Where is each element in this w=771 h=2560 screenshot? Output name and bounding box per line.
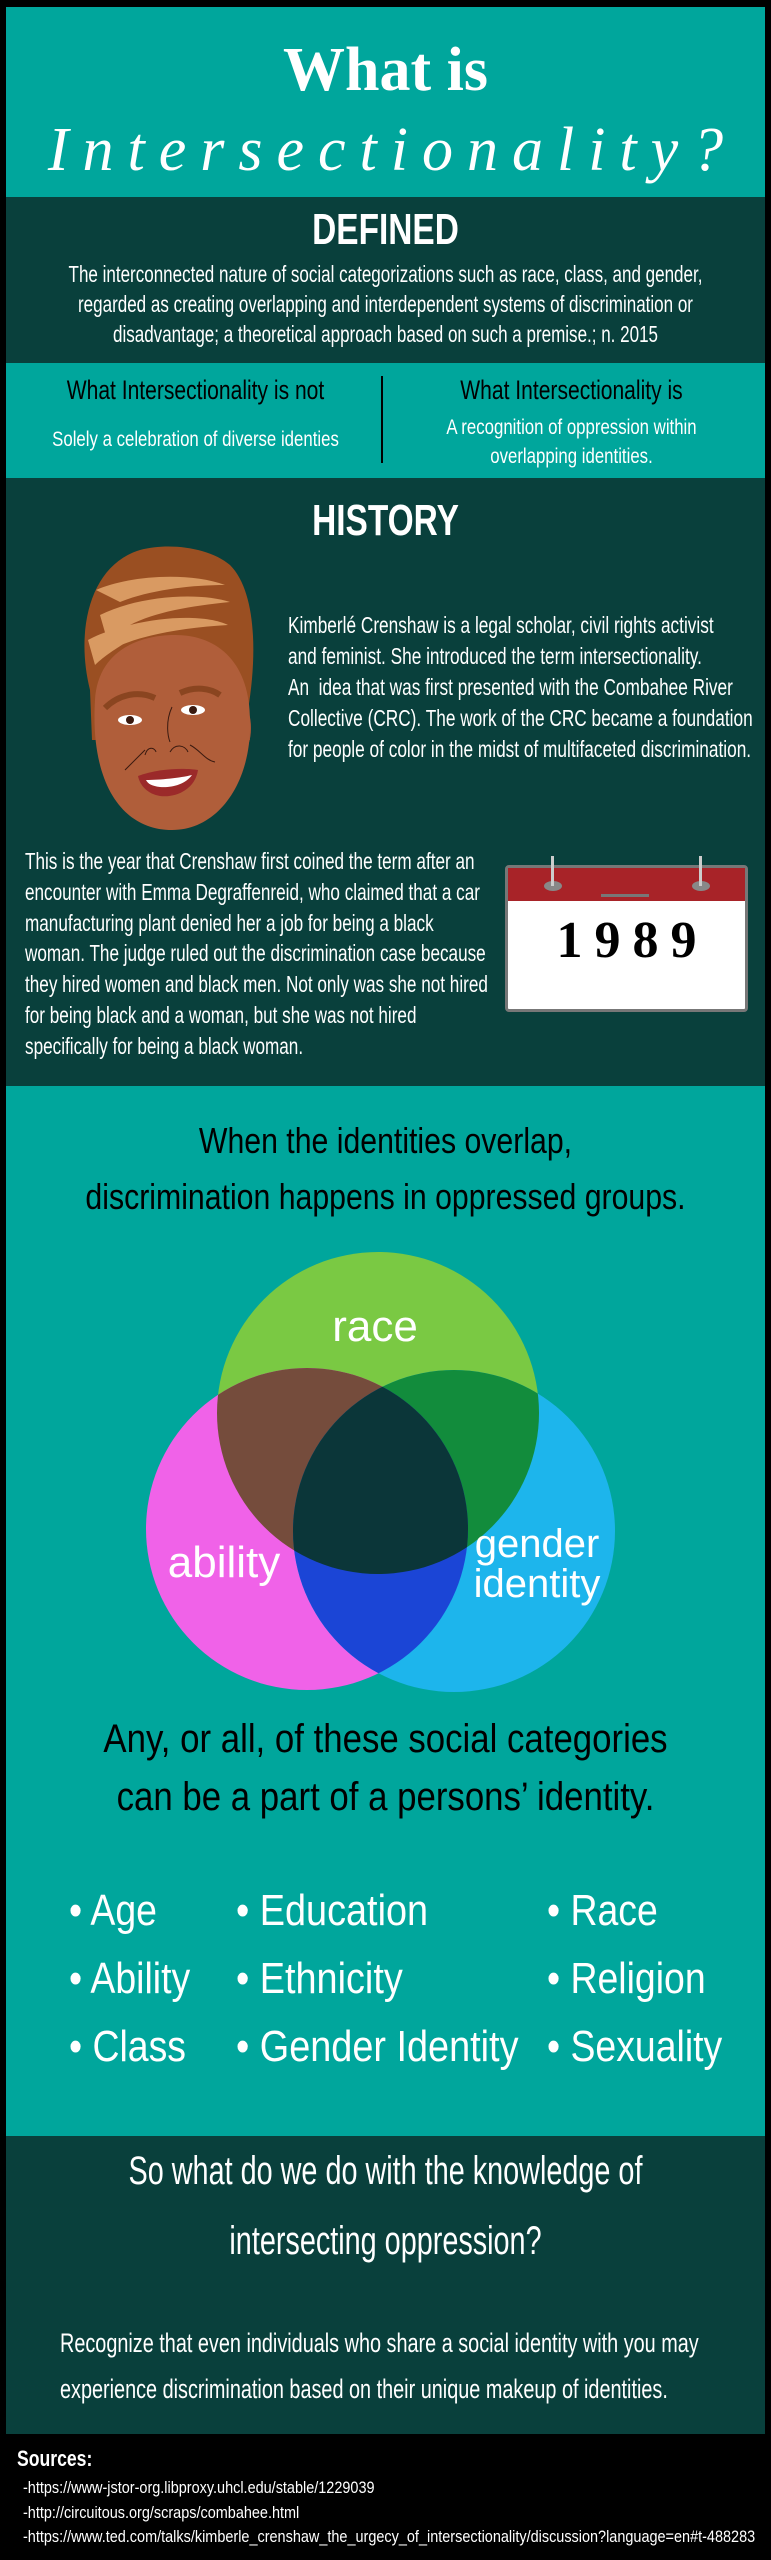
text: 1989 story: for being black and a woman, but she was not hired [25,1002,416,1028]
text: 1989 story [25,848,488,1059]
text: 1989 story: woman. The judge ruled out the discrimination case because [25,940,486,966]
text: definition: regarded as creating overlapping and interdependent systems of discrimination or [78,291,693,317]
column: is not [52,375,339,451]
heading: social categories: can be a part of a persons’ identity. [117,1775,654,1819]
sources [17,2446,755,2546]
chart: venn diagram: gender [475,1522,599,1566]
column: is not: What Intersectionality is not [67,375,324,405]
text: definition [68,261,702,347]
list: categories: • Age [69,1886,157,1935]
text: recommendation: Recognize that even individuals who share a social identity with you may [60,2328,699,2358]
heading: overlap statement: discrimination happens in oppressed groups. [85,1176,686,1217]
list: categories: • Sexuality [547,2022,722,2071]
column: is: What Intersectionality is [460,375,683,405]
text: 1989 story: they hired women and black men. Not only was she not hired [25,971,488,997]
text: definition: The interconnected nature of social categorizations such as race, class, and gender, [69,261,702,287]
panel: history [6,478,765,1086]
text: Crenshaw bio: An idea that was first presented with the Combahee River [288,674,733,700]
divider [381,376,383,463]
chart: venn diagram: race [332,1302,418,1351]
column: is: A recognition of oppression within [446,416,697,439]
heading: social categories: Any, or all, of these social categories [103,1717,668,1761]
text: 1989 story: This is the year that Crenshaw first coined the term after an [25,848,475,874]
text: -https://www.ted.com/talks/kimberle_crenshaw_the_urgecy_of_intersectionality/discussion?language=en#t-488283 [23,2527,755,2546]
heading: question: So what do we do with the knowledge of [129,2149,642,2193]
heading: question: intersecting oppression? [229,2219,542,2263]
text: Sources: [17,2446,92,2471]
panel: title [6,7,765,197]
text: definition: disadvantage; a theoretical approach based on such a premise.; n. 2015 [113,321,658,347]
icon: portrait of Crenshaw [84,546,254,830]
panel: venn section [6,1086,765,2136]
title: Intersectionality?: Intersectionality? [48,116,737,184]
heading: overlap statement [85,1120,686,1217]
list: categories [69,1886,722,2071]
column: is not: Solely a celebration of diverse identies [52,428,339,451]
heading: HISTORY: HISTORY [312,496,459,545]
text: -http://circuitous.org/scraps/combahee.html [23,2502,299,2522]
chart: venn diagram: identity [474,1562,600,1606]
heading: overlap statement: When the identities overlap, [199,1120,572,1161]
list: categories: • Religion [547,1954,706,2003]
list: categories: • Education [236,1886,428,1935]
text: recommendation: experience discrimination based on their unique makeup of identities. [60,2374,668,2404]
text: recommendation [60,2328,699,2404]
text: Crenshaw bio [288,612,753,762]
text: Crenshaw bio: Kimberlé Crenshaw is a legal scholar, civil rights activist [288,612,714,638]
list: categories: • Ethnicity [236,1954,403,2003]
text: 1989 story: encounter with Emma Degraffenreid, who claimed that a car [25,879,480,905]
icon: calendar 1989: 1989 [556,912,708,969]
title: What is: What is [283,36,488,104]
text: 1989 story: manufacturing plant denied her a job for being a black [25,910,434,936]
panel: what to do [6,2136,765,2434]
column: is: overlapping identities. [490,445,653,468]
list: categories: • Ability [69,1954,190,2003]
text: 1989 story: specifically for being a black woman. [25,1033,303,1059]
text: Crenshaw bio: and feminist. She introduced the term intersectionality. [288,643,702,669]
heading: DEFINED: DEFINED [312,205,459,254]
heading: question [129,2149,643,2263]
text: -https://www-jstor-org.libproxy.uhcl.edu/stable/1229039 [23,2478,375,2497]
chart: venn diagram [146,1252,615,1692]
text: Crenshaw bio: Collective (CRC). The work of the CRC became a foundation [288,705,753,731]
heading: social categories [103,1717,668,1819]
text: Crenshaw bio: for people of color in the midst of multifaceted discrimination. [288,736,751,762]
panel: is / is not [6,363,765,478]
list: categories: • Race [547,1886,658,1935]
list: categories: • Gender Identity [236,2022,518,2071]
panel: defined [6,197,765,363]
list: categories: • Class [69,2022,186,2071]
chart: venn diagram: ability [168,1538,280,1587]
icon: calendar 1989 [505,856,748,1012]
column: is [446,375,697,468]
